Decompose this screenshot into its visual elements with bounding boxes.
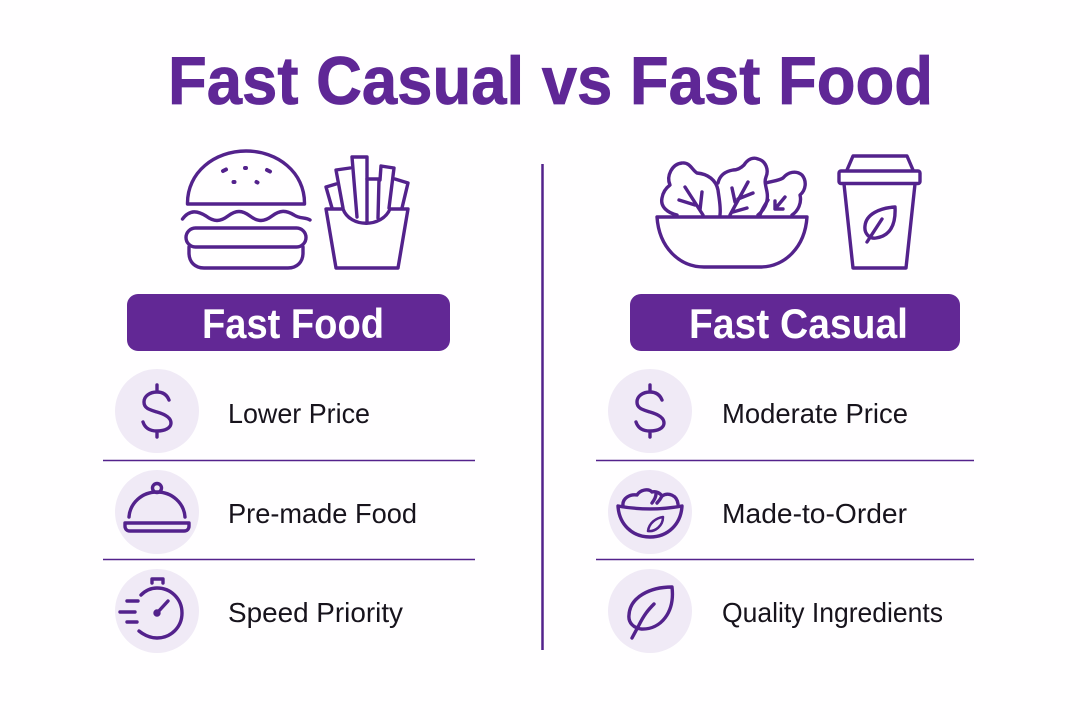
icon: fries: [326, 157, 408, 268]
center divider: [541, 164, 544, 650]
header: fast food: [127, 294, 450, 351]
row: moderate price: Moderate Price: [722, 398, 908, 429]
panel: fast food: [103, 151, 475, 653]
row: quality ingredients: Quality Ingredients: [722, 597, 943, 628]
icon: leaf: [629, 587, 672, 638]
title: Fast Casual vs Fast Food: [168, 43, 933, 119]
icon: stopwatch: [120, 579, 182, 638]
icon: cloche: [125, 484, 189, 531]
icon: dollar: [636, 385, 664, 437]
row: made-to-order: Made-to-Order: [722, 498, 907, 529]
row: lower price: [115, 369, 370, 453]
row: pre-made food: [115, 470, 417, 554]
row: pre-made food: Pre-made Food: [228, 498, 417, 529]
header: fast casual: [630, 294, 960, 351]
row: speed priority: Speed Priority: [228, 597, 403, 628]
header: fast food: Fast Food: [202, 300, 384, 347]
row: lower price: Lower Price: [228, 398, 370, 429]
icon: salad bowl: [657, 158, 807, 267]
icon: dollar: [143, 385, 171, 437]
row: speed priority: [115, 569, 403, 653]
row: quality ingredients: [608, 569, 943, 653]
icon: coffee cup: [839, 156, 920, 268]
header: fast casual: Fast Casual: [689, 300, 908, 347]
row: made-to-order: [608, 470, 907, 554]
panel: fast casual: [596, 156, 974, 653]
icon: burger: [182, 151, 310, 268]
row: moderate price: [608, 369, 908, 453]
icon: food bowl: [618, 490, 682, 537]
